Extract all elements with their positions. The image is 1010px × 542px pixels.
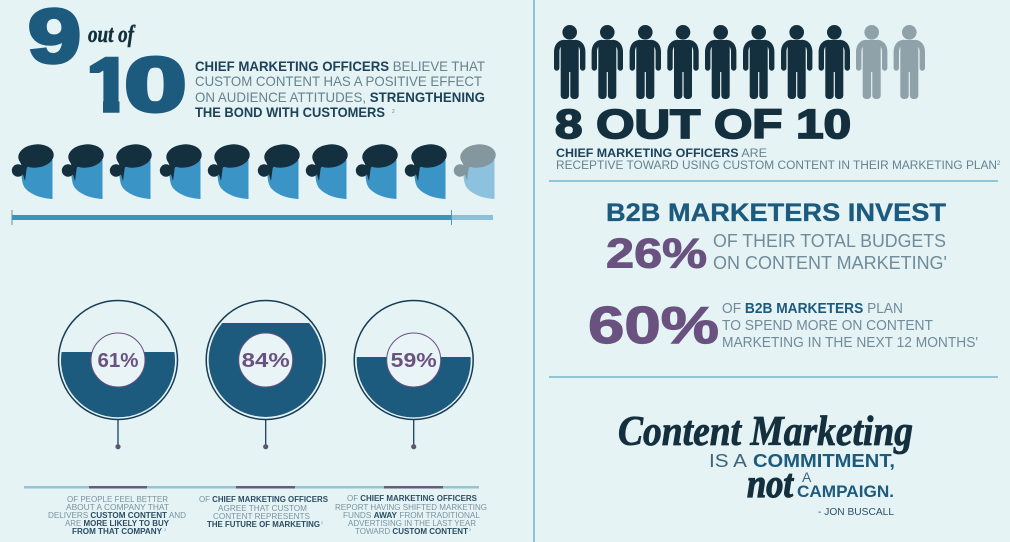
- text block: chief marketing officers believe: CUSTOM CONTENT HAS A POSITIVE EFFECT: [195, 73, 482, 89]
- icon: head 3: [110, 143, 153, 199]
- stat: 60 percent: [588, 297, 978, 355]
- heading: B2B marketers invest: B2B MARKETERS INVEST: [606, 199, 946, 227]
- icon: person 5: [708, 25, 734, 99]
- icon: head 5: [208, 143, 251, 199]
- divider: [549, 376, 998, 378]
- caption: 61 percent: ARE MORE LIKELY TO BUY: [65, 519, 170, 528]
- caption: 61 percent: [48, 495, 186, 536]
- quote: not: [747, 461, 795, 506]
- quote: A: [802, 469, 812, 485]
- stat: 26 percent: 26%: [606, 230, 707, 276]
- text block: receptive toward custom content: [556, 148, 1001, 172]
- text block: chief marketing officers believe: [195, 58, 485, 120]
- stat: 60 percent: MARKETING IN THE NEXT 12 MONTHS': [722, 335, 978, 351]
- divider with purple segments: [24, 486, 479, 488]
- text block: receptive toward custom content: 2: [997, 161, 1001, 167]
- icon row: nine of ten heads: [12, 143, 497, 199]
- divider: [549, 180, 998, 182]
- icon: head 9: [405, 143, 448, 199]
- icon: head 7: [306, 143, 349, 199]
- icon: head 8: [356, 143, 399, 199]
- heading: 8 out of 10: 8 OUT OF 10: [555, 101, 851, 147]
- quote: Content Marketing: [618, 409, 913, 455]
- text block: receptive toward custom content: RECEPTIVE TOWARD USING CUSTOM CONTENT IN THEIR MARKETING PLAN: [556, 160, 997, 172]
- quote: CAMPAIGN.: [797, 482, 894, 501]
- icon: person 10 (faded): [896, 25, 922, 99]
- quote: - JON BUSCALL: [818, 507, 894, 518]
- progress bar: 90 percent: [12, 210, 493, 225]
- icon: person 4: [670, 25, 696, 99]
- icon: head 1: [12, 143, 55, 199]
- caption: 59 percent: 2: [469, 527, 472, 532]
- icon: person 7: [784, 25, 810, 99]
- caption: 84 percent: [199, 495, 329, 529]
- quote: COMMITMENT,: [753, 451, 895, 471]
- icon: person 2: [594, 25, 620, 99]
- caption: 61 percent: OF PEOPLE FEEL BETTER: [67, 495, 168, 504]
- vertical panel divider: [533, 0, 535, 542]
- caption: 84 percent: CONTENT REPRESENTS: [213, 512, 310, 521]
- icon: person 9 (faded): [859, 25, 885, 99]
- icon row: eight of ten people: [557, 25, 922, 99]
- caption: 61 percent: ABOUT A COMPANY THAT: [66, 503, 169, 512]
- quote: [618, 409, 913, 518]
- stat: 60 percent: 60%: [588, 297, 719, 355]
- text block: chief marketing officers believe: 2: [392, 109, 395, 115]
- icon: person 1: [557, 25, 583, 99]
- caption: 61 percent: DELIVERS CUSTOM CONTENT AND: [48, 511, 186, 520]
- caption: 84 percent: AGREE THAT CUSTOM: [218, 504, 307, 513]
- stat: 26 percent: ON CONTENT MARKETING': [713, 253, 947, 273]
- icon: head 6: [258, 143, 301, 199]
- text block: chief marketing officers believe: THE BOND WITH CUSTOMERS: [195, 104, 385, 120]
- caption: 84 percent: 2: [321, 520, 324, 525]
- quote: IS A: [709, 451, 747, 471]
- caption: 59 percent: ADVERTISING IN THE LAST YEAR: [348, 519, 476, 528]
- icon: head 4: [160, 143, 203, 199]
- icon: head 10 (faded): [454, 143, 497, 199]
- caption: 59 percent: FUNDS AWAY FROM TRADITIONAL: [343, 511, 481, 520]
- headline: 9 out of 10: 1: [86, 43, 132, 128]
- icon: person 8: [821, 25, 847, 99]
- chart: 59 percent circle: [354, 300, 473, 449]
- headline: 9 out of 10: 0: [124, 43, 186, 128]
- chart: 84 percent circle: 84%: [242, 350, 290, 372]
- text block: receptive toward custom content: CHIEF MARKETING OFFICERS ARE: [556, 148, 767, 160]
- caption: 59 percent: OF CHIEF MARKETING OFFICERS: [347, 494, 478, 503]
- chart: 84 percent circle: [206, 300, 325, 449]
- icon: person 3: [632, 25, 658, 99]
- stat: 26 percent: [606, 230, 947, 276]
- caption: 61 percent: 2: [164, 527, 167, 532]
- chart: 61 percent circle: [58, 300, 178, 449]
- stat: 26 percent: OF THEIR TOTAL BUDGETS: [713, 231, 946, 251]
- stat: 60 percent: TO SPEND MORE ON CONTENT: [722, 318, 933, 334]
- icon: person 6: [746, 25, 772, 99]
- stat: 60 percent: OF B2B MARKETERS PLAN: [722, 301, 903, 317]
- chart: 61 percent circle: 61%: [98, 350, 139, 372]
- text block: chief marketing officers believe: ON AUDIENCE ATTITUDES, STRENGTHENING: [195, 89, 485, 105]
- caption: 61 percent: FROM THAT COMPANY: [72, 527, 163, 536]
- caption: 59 percent: [335, 494, 487, 536]
- caption: 84 percent: THE FUTURE OF MARKETING: [207, 520, 320, 529]
- text block: chief marketing officers believe: CHIEF MARKETING OFFICERS BELIEVE THAT: [195, 58, 485, 74]
- chart: 59 percent circle: 59%: [391, 350, 437, 372]
- icon: head 2: [62, 143, 105, 199]
- headline: 9 out of 10: [29, 7, 185, 114]
- caption: 59 percent: REPORT HAVING SHIFTED MARKETING: [335, 503, 487, 512]
- caption: 84 percent: OF CHIEF MARKETING OFFICERS: [199, 495, 329, 504]
- caption: 59 percent: TOWARD CUSTOM CONTENT: [355, 527, 468, 536]
- headline: 9 out of 10: out of: [88, 22, 136, 48]
